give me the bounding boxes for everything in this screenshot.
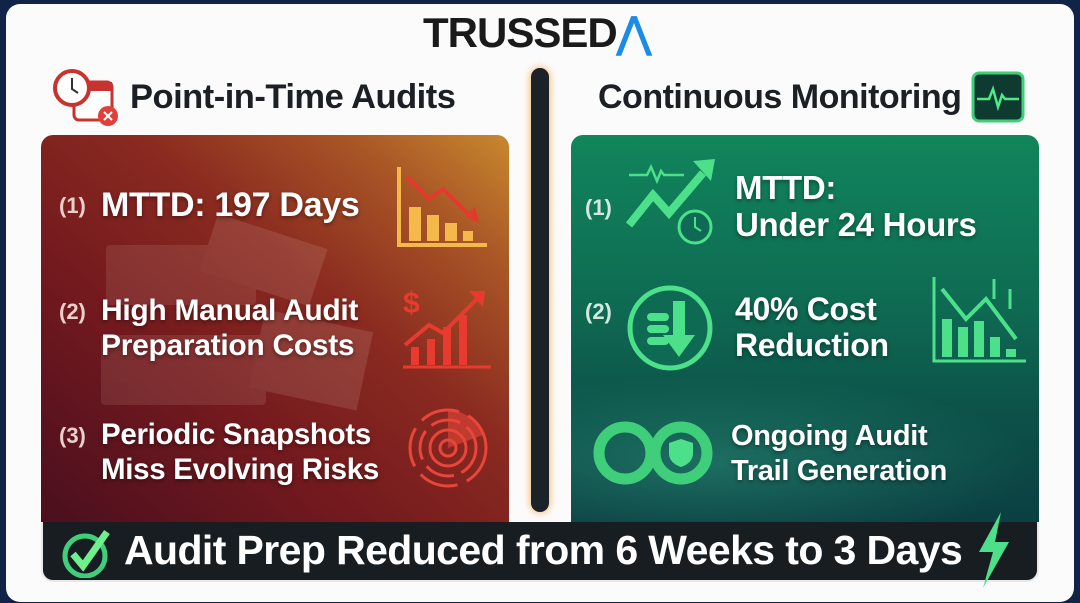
item 3: Miss Evolving Risks [101,453,379,486]
icon: calendar clock [53,69,118,126]
item 2: Preparation Costs [101,329,354,362]
icon: coins down [628,286,712,370]
item 3 [59,408,488,488]
item 3: Periodic Snapshots [101,418,371,451]
icon: check circle [62,530,110,578]
bottom banner [41,522,1039,582]
bottom banner: Audit Prep Reduced from 6 Weeks to 3 Days [124,527,962,573]
icon: lightning [979,512,1009,588]
item 1: Under 24 Hours [735,206,977,243]
background: paper stack and calendars [101,216,373,410]
item 1 [585,159,977,244]
icon: radar [408,408,488,488]
item 2 [585,277,1026,370]
heading: left [53,69,455,126]
item 1: MTTD: 197 Days [101,186,359,224]
panel: point-in-time audits [41,135,509,522]
item 2 [59,287,491,368]
panel: continuous monitoring [571,135,1039,522]
item 2: (2) [585,299,612,324]
icon: declining bar chart [397,167,487,247]
heading: left: Point-in-Time Audits [130,78,455,116]
item 1: (1) [585,195,612,220]
item 2: 40% Cost [735,291,877,327]
icon: trend and clock [626,159,715,244]
item 2: Reduction [735,327,889,363]
heading: right: Continuous Monitoring [598,78,961,116]
item 3 [594,420,947,487]
item 3: (3) [59,423,86,448]
divider [531,68,549,512]
icon: declining chart [932,277,1026,362]
item 2: (2) [59,299,86,324]
icon: rising cost chart [403,287,491,368]
icon: rising cost chart: $ [403,287,420,320]
item 1 [59,167,487,247]
icon: heartbeat monitor [972,72,1024,122]
logo: TRUSSED⋀ [423,9,650,56]
icon: infinity shield [594,422,712,484]
heading: right [598,72,1024,122]
item 1: MTTD: [735,169,836,206]
item 3: Trail Generation [731,455,947,487]
item 1: (1) [59,193,86,218]
item 3: Ongoing Audit [731,420,927,452]
item 2: High Manual Audit [101,294,358,327]
